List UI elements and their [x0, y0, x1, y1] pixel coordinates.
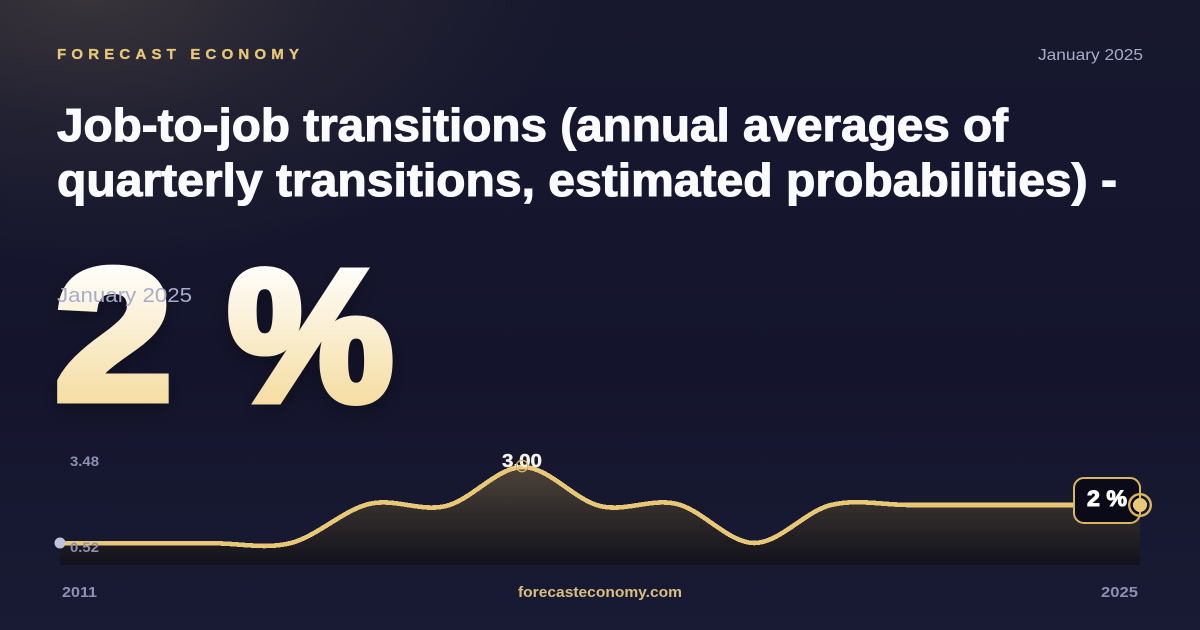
start point: [54, 538, 66, 548]
value badge: 2 %: [1087, 486, 1127, 511]
big value: 2: [55, 232, 172, 439]
line chart: [54, 451, 1151, 565]
date top right: January 2025: [1038, 47, 1143, 64]
title: quarterly transitions, estimated probabilities) -: [57, 154, 1117, 206]
axis min label: 0.52: [70, 539, 99, 555]
peak label: 3.00: [502, 451, 542, 471]
big value: [55, 232, 393, 440]
title: Job-to-job transitions (annual averages of: [57, 99, 1009, 151]
data line: [60, 467, 1140, 546]
brand label: FORECAST ECONOMY: [57, 46, 299, 63]
date overlapping big value: January 2025: [57, 285, 192, 307]
area under line: [60, 467, 1140, 565]
source website: forecasteconomy.com: [518, 584, 682, 601]
value badge: [1074, 478, 1140, 523]
axis max label: 3.48: [70, 453, 99, 469]
end point marker: [1129, 494, 1151, 516]
peak marker: [516, 460, 528, 472]
x axis start year: 2011: [62, 584, 97, 601]
title: [57, 99, 1117, 206]
x axis end year: 2025: [1101, 584, 1138, 601]
big value: %: [228, 233, 393, 440]
